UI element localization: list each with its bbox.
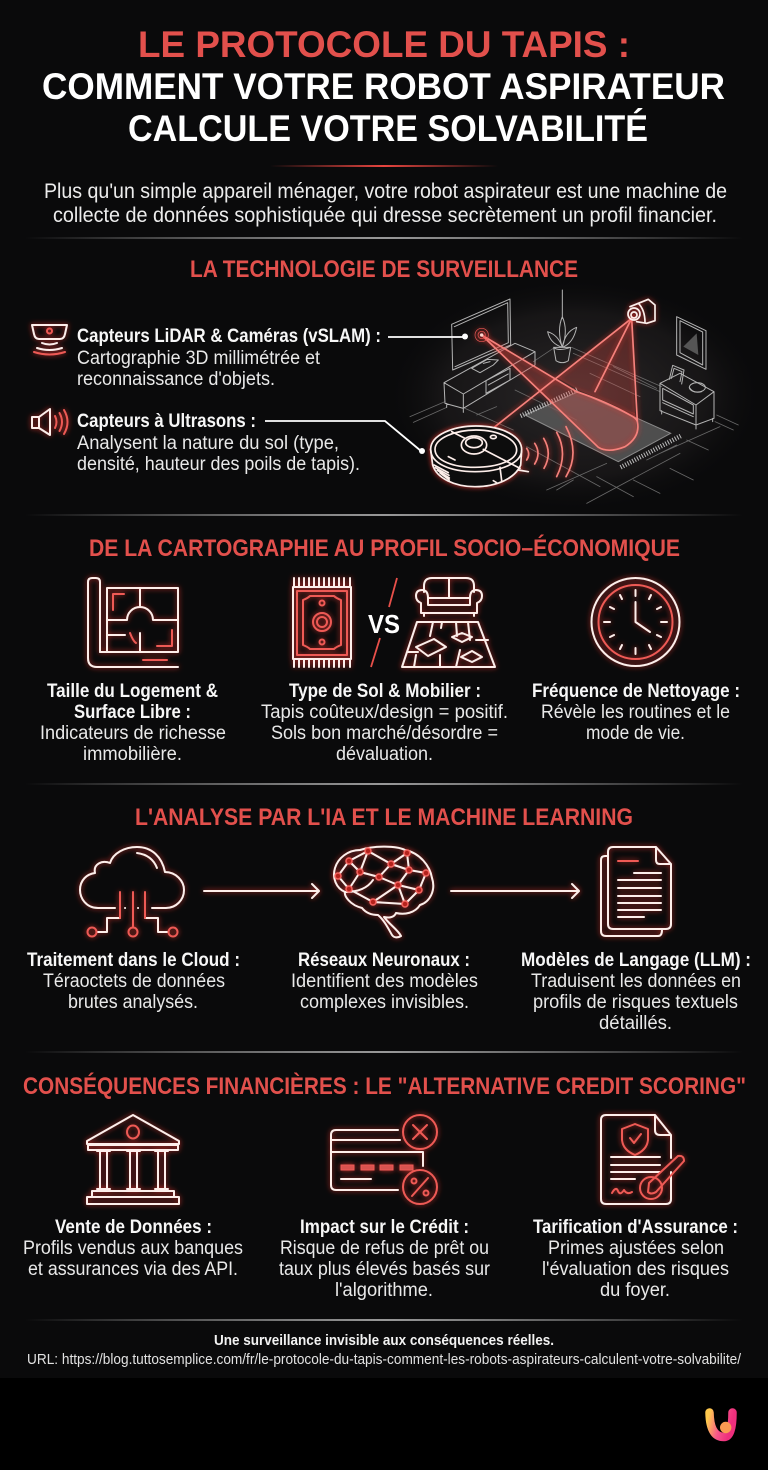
footer: URL: https://blog.tuttosemplice.com/fr/le-protocole-du-tapis-comment-les-robots-aspirateurs-calculent-votre-solvabilite/: [27, 1352, 742, 1368]
laser fills: [482, 335, 637, 449]
text: floor type: [261, 681, 508, 765]
text: cloud: brutes analysés.: [68, 992, 198, 1013]
intro text: Plus qu'un simple appareil ménager, votre robot aspirateur est une machine de: [44, 180, 727, 203]
robot vacuum: [431, 426, 573, 487]
illustration: smart room scene: [385, 277, 765, 513]
text: language models: profils de risques textuels: [533, 992, 738, 1013]
text: data sale: [23, 1217, 243, 1280]
title: COMMENT VOTRE ROBOT ASPIRATEUR: [42, 66, 725, 107]
text: data sale: Profils vendus aux banques: [23, 1238, 243, 1259]
text: insurance pricing: Primes ajustées selon: [548, 1238, 724, 1259]
logo: [710, 1412, 732, 1437]
text: lidar: Cartographie 3D millimétrée et: [77, 348, 321, 369]
nightstand: [660, 373, 714, 429]
text: floor type: Tapis coûteux/design = positif.: [261, 702, 508, 723]
title: CALCULE VOTRE SOLVABILITÉ: [128, 108, 648, 149]
panel: surveillance technology: [32, 256, 765, 513]
plant: [548, 290, 577, 363]
text: data sale: Vente de Données :: [55, 1217, 212, 1238]
icon: lidar sensor: [32, 325, 67, 354]
footer: [27, 1333, 742, 1368]
vs separator: [368, 578, 400, 667]
text: housing size: immobilière.: [83, 744, 182, 765]
text: cleaning frequency: Révèle les routines et le: [541, 702, 730, 723]
text: neural networks: Identifient des modèles: [291, 971, 478, 992]
intro text: [44, 180, 727, 227]
text: cleaning frequency: [532, 681, 740, 744]
text: credit impact: [279, 1217, 491, 1301]
heading: socio-economic: DE LA CARTOGRAPHIE AU PROFIL SOCIO–ÉCONOMIQUE: [89, 534, 680, 562]
text: cloud: Téraoctets de données: [43, 971, 225, 992]
panel: socio-economic profile: [40, 534, 740, 765]
text: credit impact: Risque de refus de prêt ou: [280, 1238, 489, 1259]
text: housing size: Taille du Logement &: [47, 681, 218, 702]
text: cloud: [27, 950, 240, 1013]
icon: credit card: [331, 1115, 437, 1204]
floor lines: [410, 347, 738, 503]
heading: AI analysis: L'ANALYSE PAR L'IA ET LE MACHINE LEARNING: [135, 804, 633, 831]
text: data sale: et assurances via des API.: [28, 1259, 238, 1280]
text: ultrasonic: Capteurs à Ultrasons :: [77, 411, 256, 432]
arrow: [204, 884, 319, 898]
text: lidar: reconnaissance d'objets.: [77, 369, 275, 390]
intro text: collecte de données sophistiquée qui dresse secrètement un profil financier.: [53, 204, 717, 227]
icon: clock: [592, 578, 680, 666]
carpet: [525, 392, 671, 462]
text: insurance pricing: [533, 1217, 738, 1301]
icon: floor plan: [88, 578, 178, 667]
text: ultrasonic: densité, hauteur des poils de tapis).: [77, 454, 360, 475]
tv lens: [475, 328, 488, 342]
icon: cloud circuit: [80, 847, 184, 936]
icon: document: [601, 847, 671, 936]
text: insurance pricing: l'évaluation des risques: [542, 1259, 729, 1280]
text: cloud: Traitement dans le Cloud :: [27, 950, 240, 971]
heading: surveillance technology: LA TECHNOLOGIE DE SURVEILLANCE: [190, 256, 578, 283]
title: LE PROTOCOLE DU TAPIS :: [138, 24, 630, 65]
text: neural networks: complexes invisibles.: [300, 992, 469, 1013]
icon: carpet vs sofa: [293, 578, 351, 667]
text: housing size: Indicateurs de richesse: [40, 723, 226, 744]
text: lidar: [77, 326, 381, 390]
text: credit impact: l'algorithme.: [335, 1280, 433, 1301]
icon: neural brain: [334, 847, 433, 937]
vs separator: VS: [368, 609, 400, 639]
icon: ultrasonic speaker: [32, 409, 68, 435]
text: cleaning frequency: mode de vie.: [586, 723, 685, 744]
text: credit impact: taux plus élevés basés sur: [279, 1259, 491, 1280]
connector: ultrasonic to robot: [265, 421, 425, 454]
tv and cabinet: [452, 299, 511, 373]
text: neural networks: Réseaux Neuronaux :: [298, 950, 470, 971]
text: lidar: Capteurs LiDAR & Caméras (vSLAM) :: [77, 326, 381, 347]
text: cleaning frequency: Fréquence de Nettoyage :: [532, 681, 740, 702]
icon: insurance document: [601, 1115, 684, 1204]
laser beam lines: [482, 318, 638, 450]
text: language models: [521, 950, 751, 1034]
text: ultrasonic: [77, 411, 360, 475]
arrow: [451, 884, 579, 898]
text: ultrasonic: Analysent la nature du sol (type,: [77, 433, 339, 454]
icon: bank: [87, 1115, 179, 1204]
panel: AI analysis: [27, 804, 751, 1034]
frame: [677, 317, 706, 369]
wall camera: [628, 299, 655, 323]
text: language models: détaillés.: [599, 1013, 672, 1034]
text: housing size: [40, 681, 226, 765]
text: floor type: Type de Sol & Mobilier :: [289, 681, 481, 702]
footer: Une surveillance invisible aux conséquences réelles.: [214, 1333, 554, 1349]
text: floor type: Sols bon marché/désordre =: [271, 723, 498, 744]
text: credit impact: Impact sur le Crédit :: [300, 1217, 469, 1238]
text: neural networks: [291, 950, 478, 1013]
text: housing size: Surface Libre :: [74, 702, 191, 723]
text: insurance pricing: Tarification d'Assurance :: [533, 1217, 738, 1238]
panel: financial consequences: [23, 1072, 746, 1301]
text: insurance pricing: du foyer.: [600, 1280, 670, 1301]
connector: lidar to tv: [388, 334, 468, 340]
icon: sofa and floor: [402, 578, 495, 667]
text: floor type: dévaluation.: [336, 744, 433, 765]
text: language models: Traduisent les données en: [531, 971, 741, 992]
title: [42, 24, 725, 149]
